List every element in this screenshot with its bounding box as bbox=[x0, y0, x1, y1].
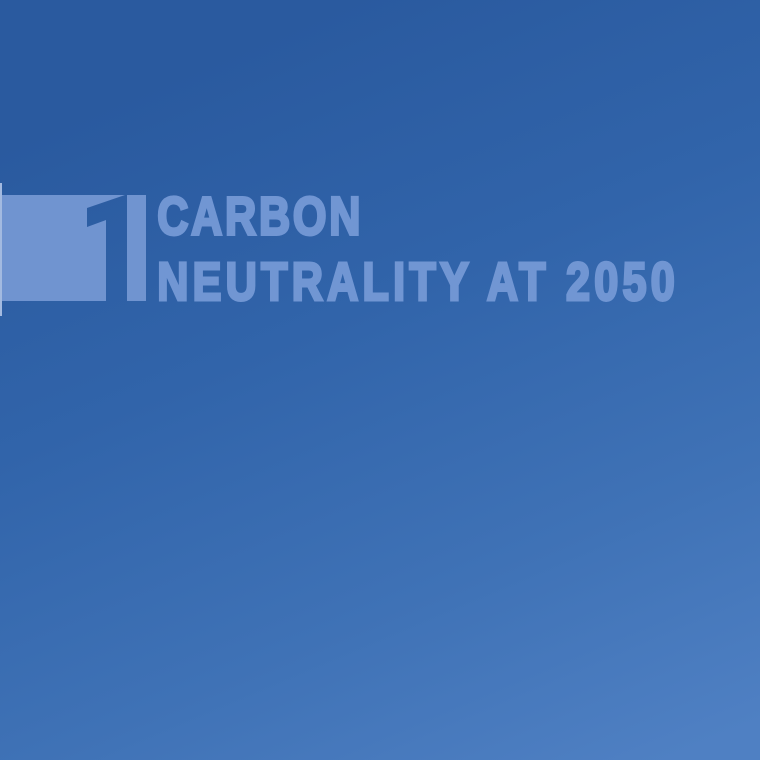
number badge: 1 bbox=[0, 183, 146, 316]
title bbox=[157, 187, 675, 312]
title line 1: CARBON bbox=[157, 187, 360, 247]
title line 2: NEUTRALITY AT 2050 bbox=[157, 253, 675, 312]
